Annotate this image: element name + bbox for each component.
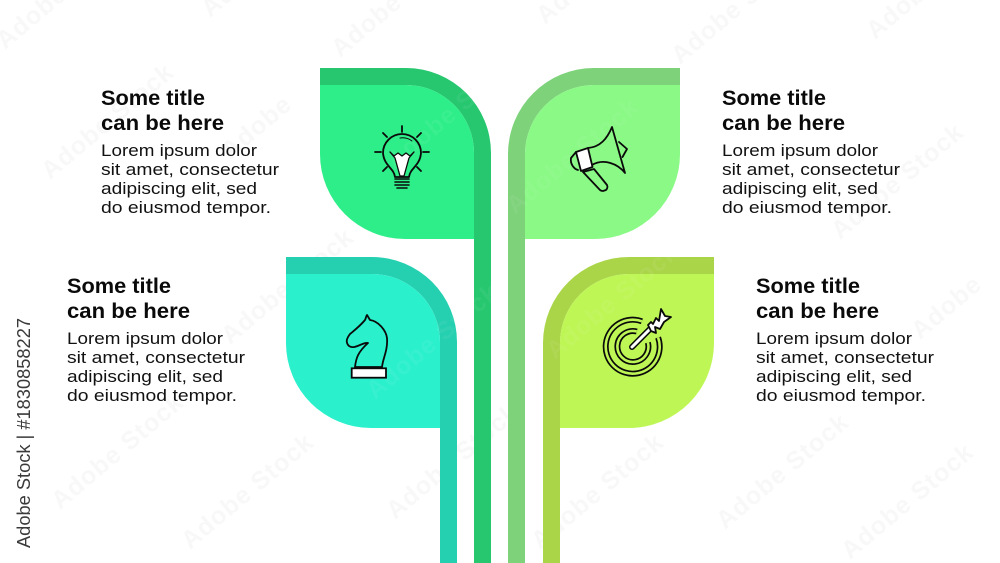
text block: lower right: adipiscing elit, sed [756, 368, 912, 386]
background watermark: Adobe Stock [836, 438, 979, 563]
leaf: top right with stem [508, 68, 680, 563]
text block: lower right: Some title [756, 274, 860, 298]
text block: top right: Lorem ipsum dolor [722, 142, 879, 160]
stock credit: Adobe Stock | #1830858227 [14, 318, 34, 548]
watermark over leaves: Adobe Stock [541, 238, 684, 365]
text block: lower right [756, 274, 935, 405]
text block: lower left: can be here [67, 299, 190, 323]
text block: lower left: sit amet, consectetur [67, 349, 246, 367]
background watermark: Adobe Stock [46, 388, 189, 515]
text block: top left: adipiscing elit, sed [101, 180, 257, 198]
text block: top left [101, 86, 280, 217]
text block: lower right: can be here [756, 299, 879, 323]
text block: top right: do eiusmod tempor. [722, 199, 892, 217]
icon: megaphone [571, 127, 627, 191]
text block: lower right: sit amet, consectetur [756, 349, 935, 367]
text block: lower left: adipiscing elit, sed [67, 368, 223, 386]
text block: top left: Some title [101, 86, 205, 110]
text block: lower left [67, 274, 246, 405]
text block: top right [722, 86, 901, 217]
text block: lower right: Lorem ipsum dolor [756, 330, 913, 348]
background watermark: Adobe Stock [826, 118, 969, 245]
text block: lower left: Lorem ipsum dolor [67, 330, 224, 348]
icon: chess knight [347, 315, 387, 378]
text block: top right: Some title [722, 86, 826, 110]
watermark over leaves: Adobe Stock [361, 278, 504, 405]
background watermark: Adobe [906, 270, 987, 345]
text block: top left: Lorem ipsum dolor [101, 142, 258, 160]
text block: lower left: Some title [67, 274, 171, 298]
background watermark: Adobe Stock [711, 408, 854, 535]
background watermark: Adobe Stock [36, 58, 179, 185]
text block: top right: adipiscing elit, sed [722, 180, 878, 198]
text block: top left: can be here [101, 111, 224, 135]
text block: top right: can be here [722, 111, 845, 135]
background watermark: Adobe [216, 90, 297, 165]
leaf: lower left with stem [286, 257, 457, 563]
text block: lower left: do eiusmod tempor. [67, 387, 237, 405]
watermark over leaves [361, 48, 684, 405]
text block: top left: do eiusmod tempor. [101, 199, 271, 217]
background watermark: Adobe Stock [176, 428, 319, 555]
watermark over leaves: Adobe Stock [501, 93, 644, 220]
icon: target with arrow [606, 309, 671, 374]
leaf: lower right with stem [543, 257, 714, 563]
text block: top left: sit amet, consectetur [101, 161, 280, 179]
background watermark: Adobe Stock [526, 428, 669, 555]
leaf: top left with stem [320, 68, 491, 563]
text block: lower right: do eiusmod tempor. [756, 387, 926, 405]
background watermark: Adobe Stock [381, 398, 524, 525]
icon: light bulb [375, 126, 429, 188]
text block: top right: sit amet, consectetur [722, 161, 901, 179]
watermark over leaves: Adobe Stock [381, 48, 524, 175]
background watermark: Adobe Stock [216, 223, 359, 350]
